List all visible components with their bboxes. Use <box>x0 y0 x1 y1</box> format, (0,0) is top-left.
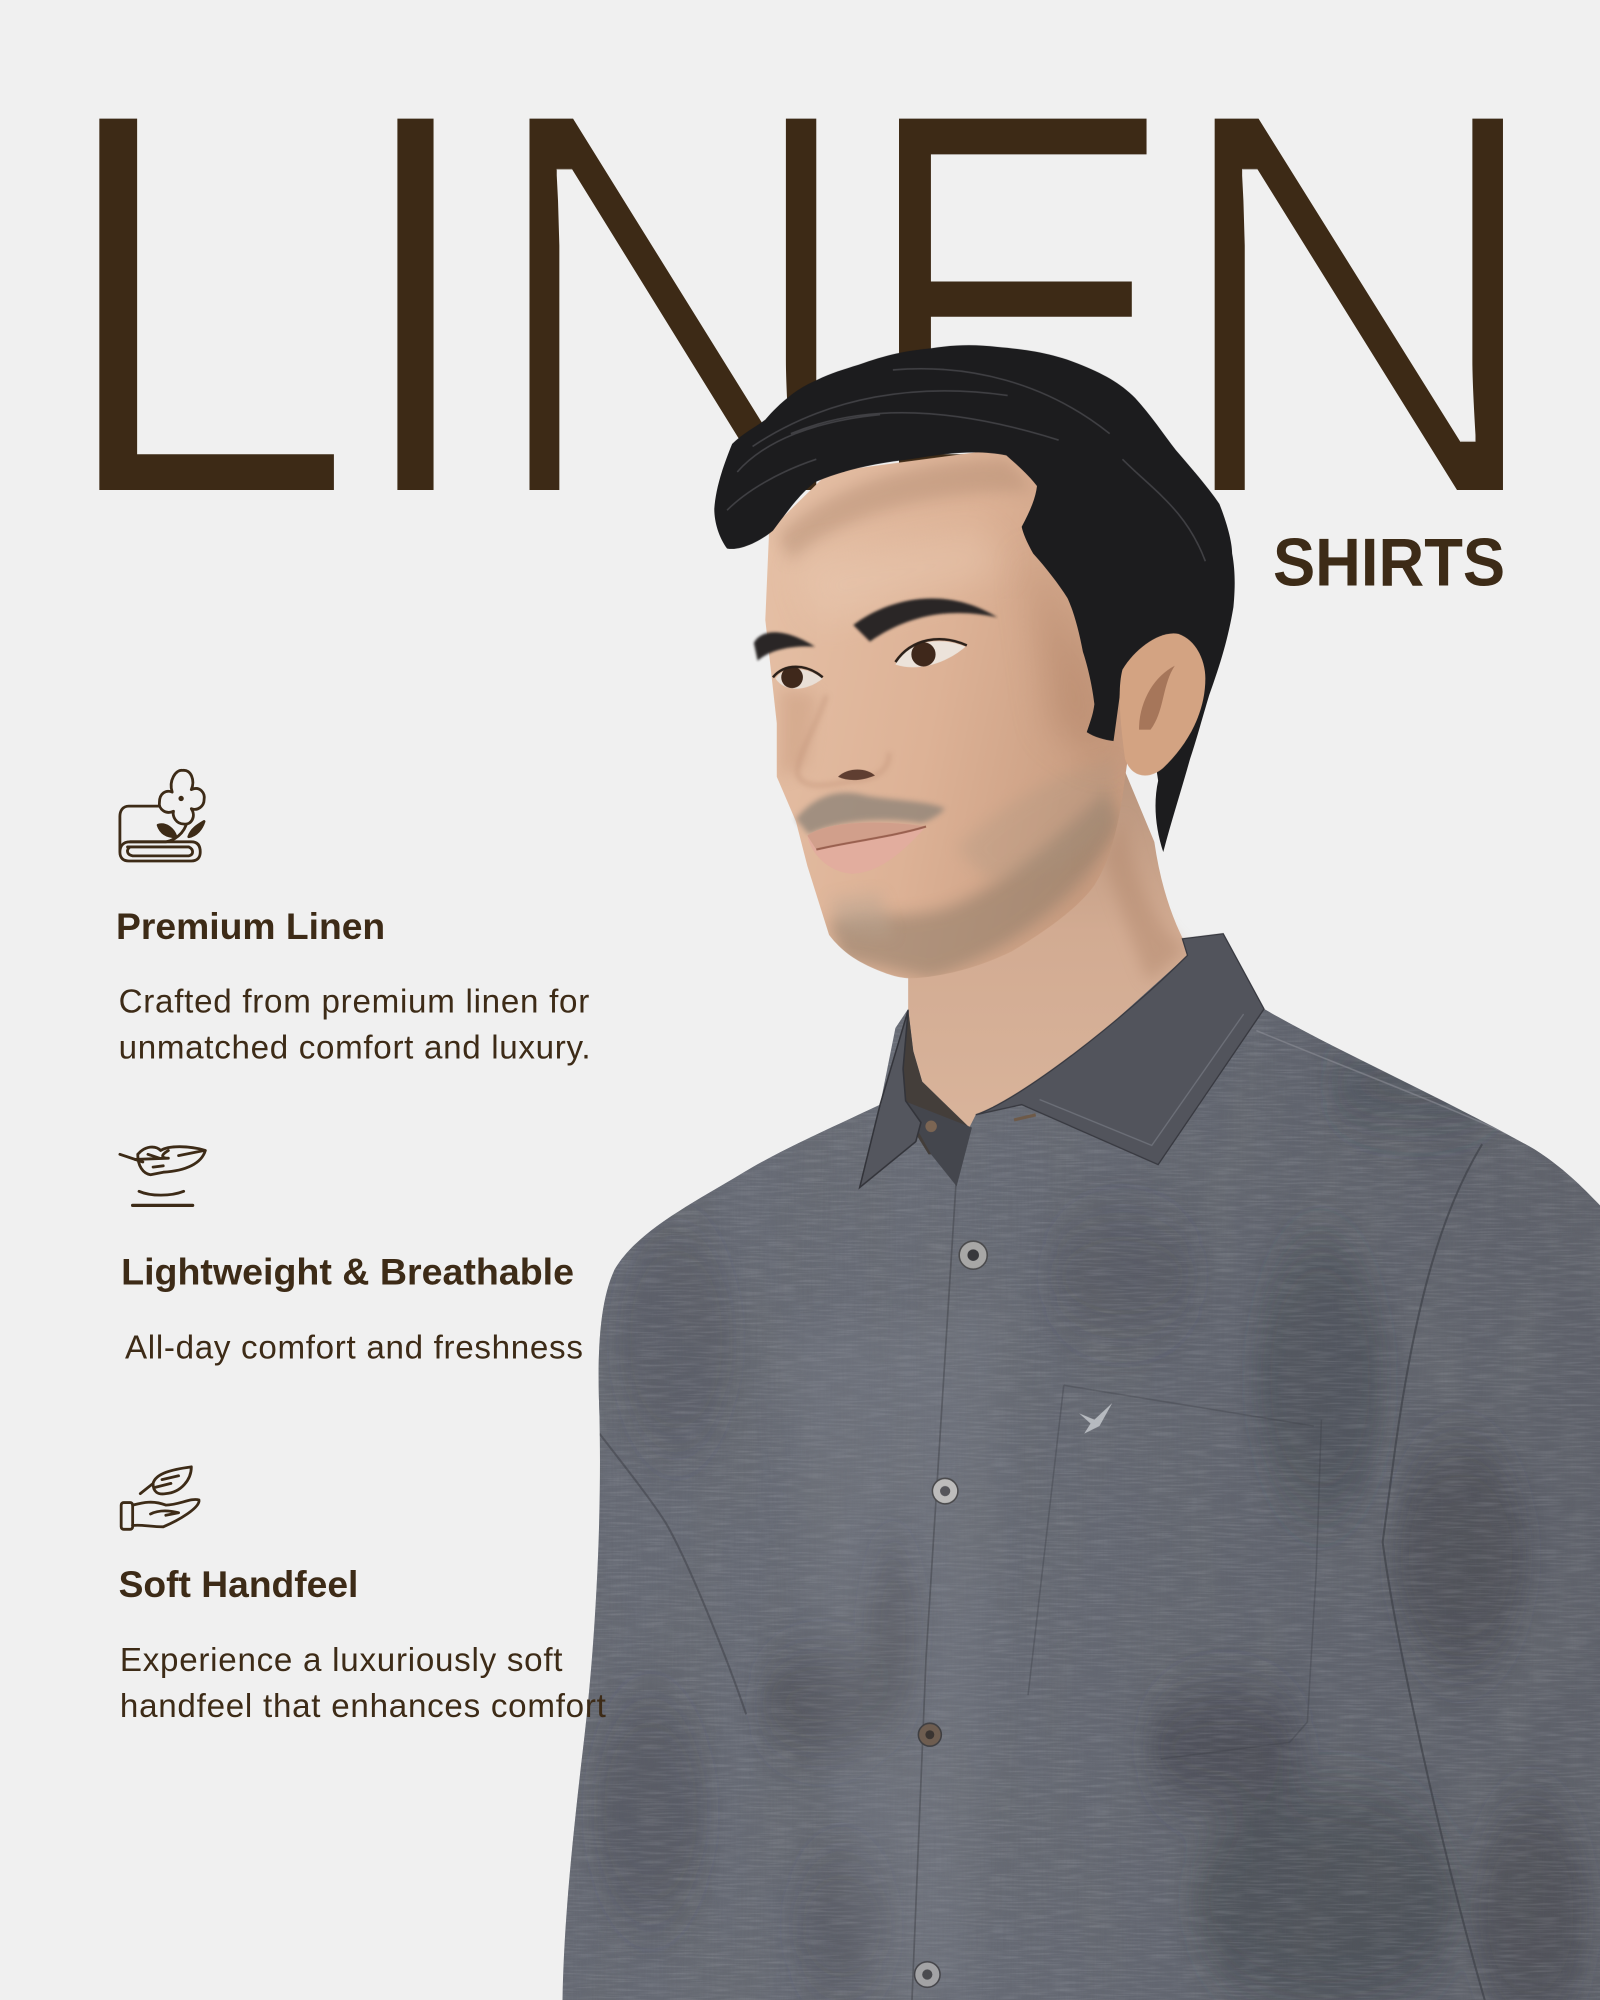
chin stubble <box>833 893 884 916</box>
description: unmatched comfort and luxury. <box>119 1030 591 1067</box>
nostril <box>838 769 875 780</box>
placket <box>912 1153 958 2000</box>
feature: soft handfeel <box>119 1467 606 1725</box>
eyebrow far <box>754 632 815 661</box>
seam: yoke <box>1256 1030 1504 1133</box>
far cheek shade <box>780 690 814 772</box>
description: Experience a luxuriously soft <box>120 1642 562 1679</box>
eye near <box>895 639 967 667</box>
title: LINEN: N <box>478 0 868 610</box>
title: LINEN: N <box>1163 0 1555 610</box>
ear <box>1120 633 1205 775</box>
heading: Premium Linen <box>116 906 385 947</box>
hairline shade <box>778 459 1033 561</box>
icon: feather <box>120 1147 205 1205</box>
description <box>119 984 591 1067</box>
description: handfeel that enhances comfort <box>120 1688 606 1725</box>
photo: man in grey linen shirt <box>548 345 1600 2000</box>
lips <box>807 823 926 874</box>
hair highlights <box>727 369 1205 561</box>
hair <box>714 345 1235 852</box>
face skin <box>765 446 1142 978</box>
face shading and beard <box>778 459 1120 978</box>
collar right <box>976 934 1264 1165</box>
heading: Soft Handfeel <box>119 1564 358 1605</box>
seam: right sleeve <box>1383 1144 1485 2000</box>
temple shade <box>1036 597 1098 744</box>
pocket logo <box>1079 1403 1112 1434</box>
pocket <box>1028 1385 1321 1759</box>
cheek stubble <box>966 770 1107 874</box>
shirt highlight: placket and chest <box>840 1550 919 1888</box>
neck side shadow <box>1103 816 1186 982</box>
collar inside <box>893 1009 969 1154</box>
eye far <box>773 666 823 689</box>
neck <box>908 765 1193 1135</box>
collar stand under button <box>901 1099 972 1186</box>
title: LINEN: I <box>339 0 492 610</box>
title: LINEN <box>45 0 1555 610</box>
shirt body <box>548 925 1600 2000</box>
jaw stubble band <box>829 791 1120 978</box>
title: LINEN: E <box>850 0 1186 610</box>
collar stitching <box>1040 1014 1244 1145</box>
mouth line <box>816 827 926 849</box>
heading: Lightweight & Breathable <box>121 1251 574 1292</box>
shirt dark smudges <box>593 1040 1588 2000</box>
eyebrow near <box>853 598 997 642</box>
icon: towel and flower <box>120 770 204 861</box>
title: LINEN: L <box>45 0 360 610</box>
description: All-day comfort and freshness <box>125 1329 583 1366</box>
seam: left sleeve <box>599 1434 746 1714</box>
icon: hand with leaf <box>121 1467 199 1529</box>
description: Crafted from premium linen for <box>119 984 589 1021</box>
forehead highlight <box>831 543 986 600</box>
ear inner <box>1139 666 1175 730</box>
subtitle: SHIRTS: SHIRTS <box>1273 525 1505 600</box>
moustache <box>796 793 945 834</box>
feature: premium linen <box>116 770 591 1067</box>
collar left <box>860 1010 921 1188</box>
upper lip <box>807 823 926 849</box>
nose <box>797 695 889 785</box>
description <box>120 1642 606 1725</box>
buttons <box>915 1115 1036 1987</box>
feature: lightweight and breathable <box>120 1147 583 1366</box>
